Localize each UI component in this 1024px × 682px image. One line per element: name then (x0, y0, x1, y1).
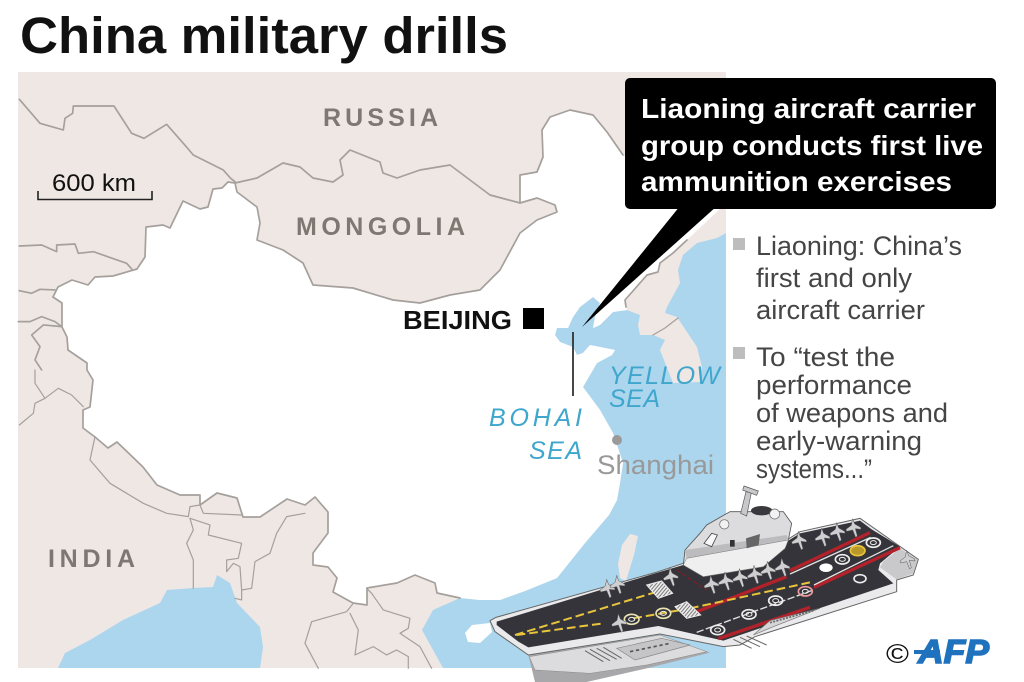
label: Shanghai with city marker (597, 435, 714, 480)
text block: Liaoning fact: aircraft carrier (756, 295, 925, 325)
label: Bohai Sea: BOHAI (489, 404, 582, 432)
credit: AFP logo: AFP (917, 633, 990, 670)
illustration: aircraft carrier (490, 486, 918, 682)
label: India: INDIA (48, 545, 135, 573)
hull and deck edge (490, 518, 918, 655)
sea: Bay of Bengal (58, 575, 263, 668)
lower hull (528, 635, 710, 682)
text block: Liaoning fact: Liaoning: China’s (756, 231, 962, 261)
label: Bohai Sea (489, 404, 582, 465)
country borders (18, 99, 687, 668)
callout: Liaoning live ammunition exercises: Liaoning aircraft carrier (641, 93, 976, 124)
sea: Yellow Sea, Bohai and East China Sea (422, 233, 726, 668)
red deck stripes (697, 533, 900, 639)
label: Yellow Sea: YELLOW (609, 362, 722, 390)
text block: purpose quote: performance (756, 370, 912, 400)
label: Shanghai with city marker: Shanghai (597, 450, 714, 480)
label: Russia: RUSSIA (323, 104, 438, 132)
label: Beijing with capital marker: BEIJING (403, 305, 512, 335)
text block: Liaoning fact: first and only (756, 263, 913, 293)
text block: purpose quote (733, 342, 948, 484)
yellow runway dashes (515, 582, 813, 635)
credit: AFP logo: © (886, 639, 909, 669)
island: Hainan (465, 623, 492, 643)
label: Mongolia: MONGOLIA (296, 213, 465, 241)
text block: purpose quote: early-warning (756, 426, 922, 456)
label: Yellow Sea: SEA (609, 385, 660, 413)
dim red marking ahead of island (677, 570, 707, 590)
white deck lines (697, 537, 893, 632)
label: Bohai Sea: SEA (529, 437, 582, 465)
callout: Liaoning live ammunition exercises: ammunition exercises (641, 166, 952, 197)
callout: Liaoning live ammunition exercises (582, 78, 996, 327)
China territory (53, 110, 720, 605)
credit: AFP logo (886, 633, 990, 670)
label: Yellow Sea (609, 362, 722, 413)
parked aircraft (600, 519, 915, 632)
map land background (18, 72, 726, 668)
island: Taiwan (618, 534, 638, 581)
scale bar: 600 km (38, 170, 152, 200)
hatched deck panels (647, 581, 673, 598)
text block: purpose quote: To “test the (756, 342, 895, 372)
flight deck (497, 521, 900, 647)
text block: Liaoning fact (733, 231, 962, 325)
panel: map (18, 72, 726, 668)
island superstructure (683, 486, 792, 577)
text block: purpose quote: of weapons and (756, 398, 948, 428)
scale bar: 600 km: 600 km (52, 170, 136, 197)
hull side details (585, 608, 820, 662)
text block: purpose quote: systems...” (756, 454, 872, 484)
title: China military drills (20, 7, 508, 64)
helipad circles (624, 538, 880, 635)
bow ramp side panel (880, 548, 917, 579)
leader line to Bohai Sea (572, 332, 574, 396)
callout: Liaoning live ammunition exercises: group conducts first live (641, 130, 983, 161)
